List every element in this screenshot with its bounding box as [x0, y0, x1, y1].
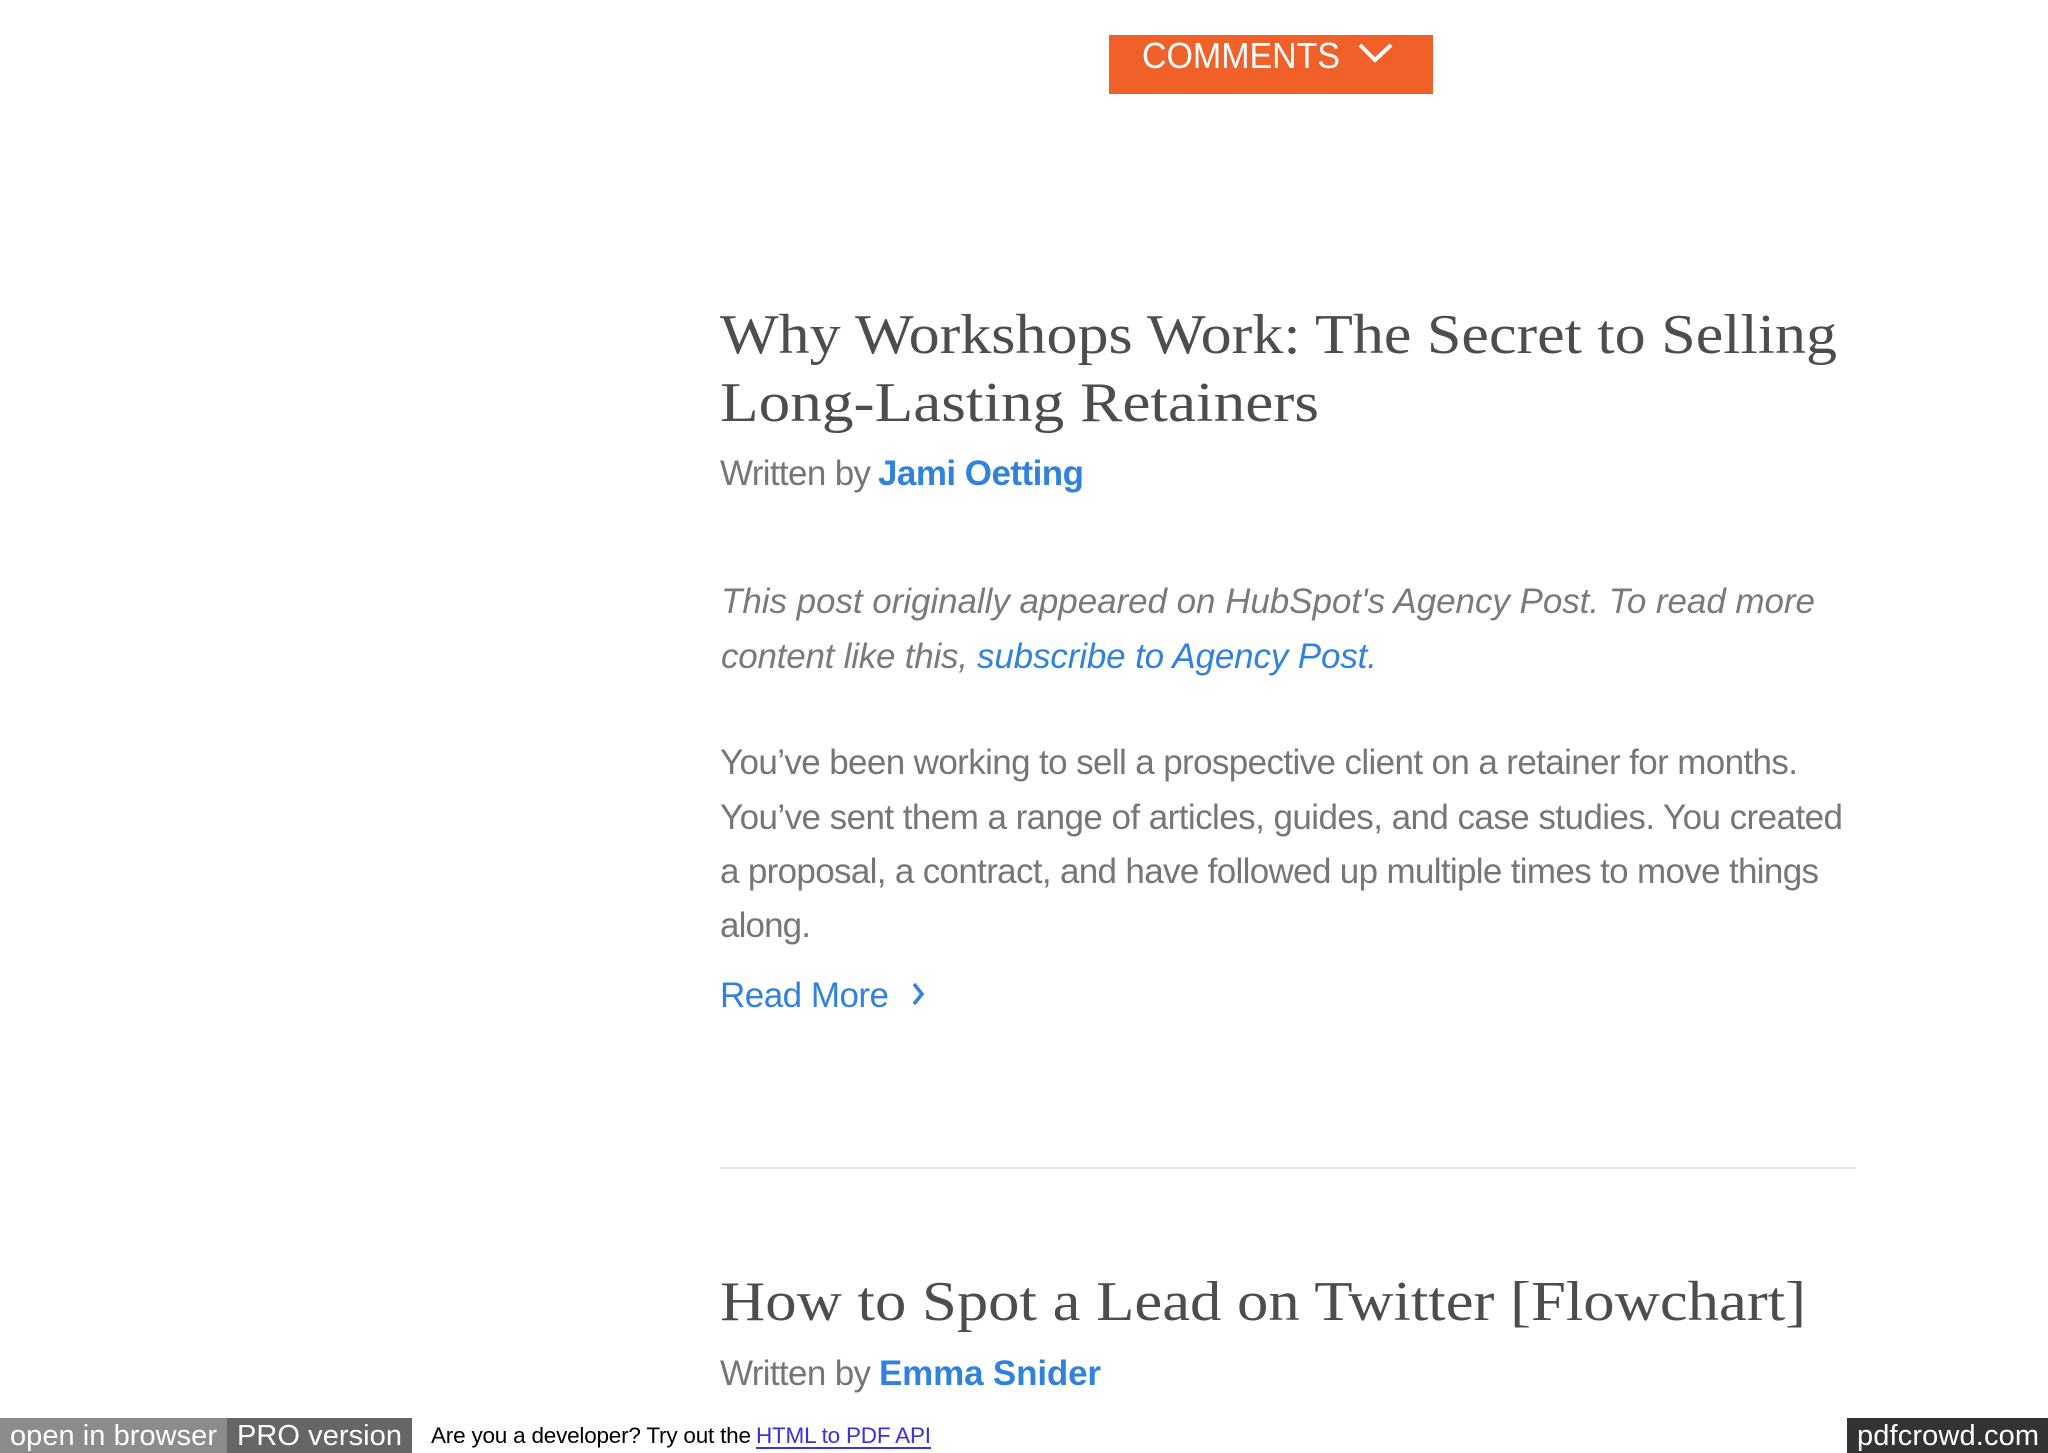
comments button: [1109, 35, 1433, 94]
article 1 byline: Jami Oetting: [878, 454, 1084, 493]
comments button: COMMENTS: [1142, 35, 1340, 76]
article 1 body text: a proposal, a contract, and have followed up multiple times to move things: [720, 852, 1819, 891]
article 2 title: How to Spot a Lead on Twitter [Flowchart]: [720, 1271, 1806, 1333]
article 1 body text: [720, 743, 1843, 945]
footer developer text: Are you a developer? Try out the: [431, 1423, 751, 1448]
footer bar: open in browser button: open in browser: [10, 1420, 217, 1452]
article 2 byline: Written by: [720, 1354, 872, 1393]
article 1 byline: [720, 454, 1084, 493]
article 1 body text: along.: [720, 906, 811, 945]
article 1 title: Why Workshops Work: The Secret to Selling: [720, 304, 1837, 366]
footer bar: pro version button: PRO version: [237, 1420, 402, 1452]
article 1 body text: You’ve sent them a range of articles, guides, and case studies. You created: [720, 798, 1843, 837]
icon: chevron right: [914, 984, 922, 1004]
footer developer text: HTML to PDF API: [756, 1423, 931, 1448]
read more link: Read More: [720, 976, 889, 1015]
article 1 italic note: subscribe to Agency Post.: [977, 637, 1377, 676]
article 2 byline: [720, 1354, 1101, 1393]
article 1 italic note: content like this,: [721, 637, 968, 676]
footer pdfcrowd badge: pdfcrowd.com: [1857, 1420, 2039, 1452]
article 1 title: Long-Lasting Retainers: [720, 372, 1319, 434]
article 2 byline: Emma Snider: [879, 1354, 1101, 1393]
article 1 title: [720, 304, 1837, 434]
article 1 italic note: This post originally appeared on HubSpot's Agency Post. To read more: [721, 582, 1815, 621]
footer developer text: [431, 1423, 931, 1449]
article 1 byline: Written by: [720, 454, 872, 493]
article 1 italic note: [721, 582, 1815, 676]
article 1 body text: You’ve been working to sell a prospective client on a retainer for months.: [720, 743, 1798, 782]
icon: chevron down: [1360, 45, 1391, 60]
